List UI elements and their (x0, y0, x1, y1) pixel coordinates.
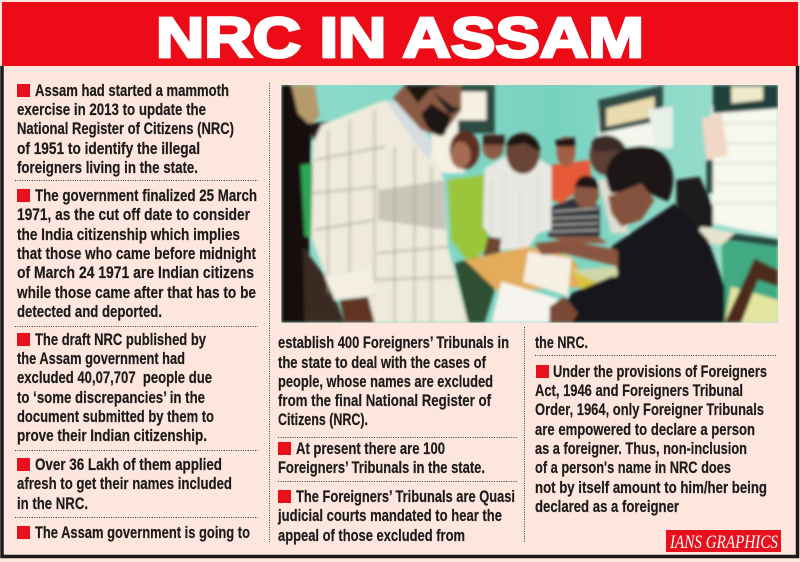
text block: mammoth exercise: National Register of Citizens (NRC) (17, 119, 234, 138)
left column (15, 81, 258, 542)
text block: mammoth exercise: of 1951 to identify the illegal (17, 139, 200, 158)
text block: 400 tribunals continued: the state to deal with the cases of (278, 353, 486, 372)
text block: 400 tribunals continued: establish 400 Foreigners’ Tribunals in (278, 333, 509, 352)
text block: Foreigners Act provisions (535, 362, 767, 516)
text block: 400 tribunals continued: people, whose names are excluded (278, 372, 493, 391)
right column (535, 333, 776, 516)
title banner (2, 2, 798, 70)
text block: draft NRC: to ‘some discrepancies’ in the (17, 388, 205, 407)
text block: draft NRC: prove their Indian citizenship. (17, 426, 207, 445)
text block: Foreigners Act provisions: Act, 1946 and Foreigners Tribunal (535, 381, 743, 400)
text block: quasi judicial courts: appeal of those excluded from (278, 526, 465, 545)
text block: cut off date (16, 186, 257, 321)
text block: cut off date: the India citizenship which implies (17, 225, 240, 244)
text block: Foreigners Act provisions: declared as a foreigner (535, 497, 679, 516)
text block: Foreigners Act provisions: of a person's name in NRC does (535, 458, 731, 477)
text block: 36 lakh applied (17, 455, 232, 513)
text block: draft NRC: document submitted by them to (17, 407, 214, 426)
text block: the NRC continued: the NRC. (535, 333, 588, 352)
text block: draft NRC (17, 330, 214, 445)
column dividers (270, 83, 524, 543)
text block: mammoth exercise: foreigners living in the state. (17, 158, 198, 177)
text block: cut off date: detected and deported. (17, 302, 162, 321)
text block: quasi judicial courts: The Foreigners’ Tribunals are Quasi (296, 487, 515, 506)
text block: 36 lakh applied: Over 36 Lakh of them applied (35, 455, 222, 474)
text block: government going to: The Assam government is going to (35, 523, 250, 542)
text block: 400 tribunals continued (278, 333, 509, 429)
text block: 400 tribunals continued: from the final National Register of (278, 391, 491, 410)
text block: 100 tribunals at present (278, 439, 485, 477)
text block: 36 lakh applied: afresh to get their names included (17, 474, 232, 493)
text block: draft NRC: the Assam government had (17, 349, 185, 368)
text block: cut off date: of March 24 1971 are Indian citizens (17, 263, 254, 282)
photo: officials checking NRC documents (278, 80, 781, 327)
text block: cut off date: The government finalized 25 March (35, 186, 257, 205)
text block: cut off date: 1971, as the cut off date to consider (17, 205, 250, 224)
text block: 100 tribunals at present: At present there are 100 (296, 439, 445, 458)
text block: mammoth exercise (17, 81, 234, 177)
text block: mammoth exercise: Assam had started a mammoth (35, 81, 229, 100)
middle column (277, 333, 518, 545)
text block: mammoth exercise: exercise in 2013 to update the (17, 100, 206, 119)
text block: quasi judicial courts: judicial courts mandated to hear the (277, 506, 502, 525)
text block: 36 lakh applied: in the NRC. (17, 494, 88, 513)
text block: quasi judicial courts (277, 487, 515, 545)
text block: draft NRC: The draft NRC published by (35, 330, 206, 349)
text block: cut off date: while those came after that has to be (16, 283, 256, 302)
text block: draft NRC: excluded 40,07,707 people due (17, 368, 212, 387)
text block: 400 tribunals continued: Citizens (NRC). (278, 410, 368, 429)
text block: 100 tribunals at present: Foreigners’ Tribunals in the state. (278, 458, 485, 477)
title: NRC IN ASSAM (156, 6, 644, 70)
text block: cut off date: that those who came before midnight (17, 244, 256, 263)
